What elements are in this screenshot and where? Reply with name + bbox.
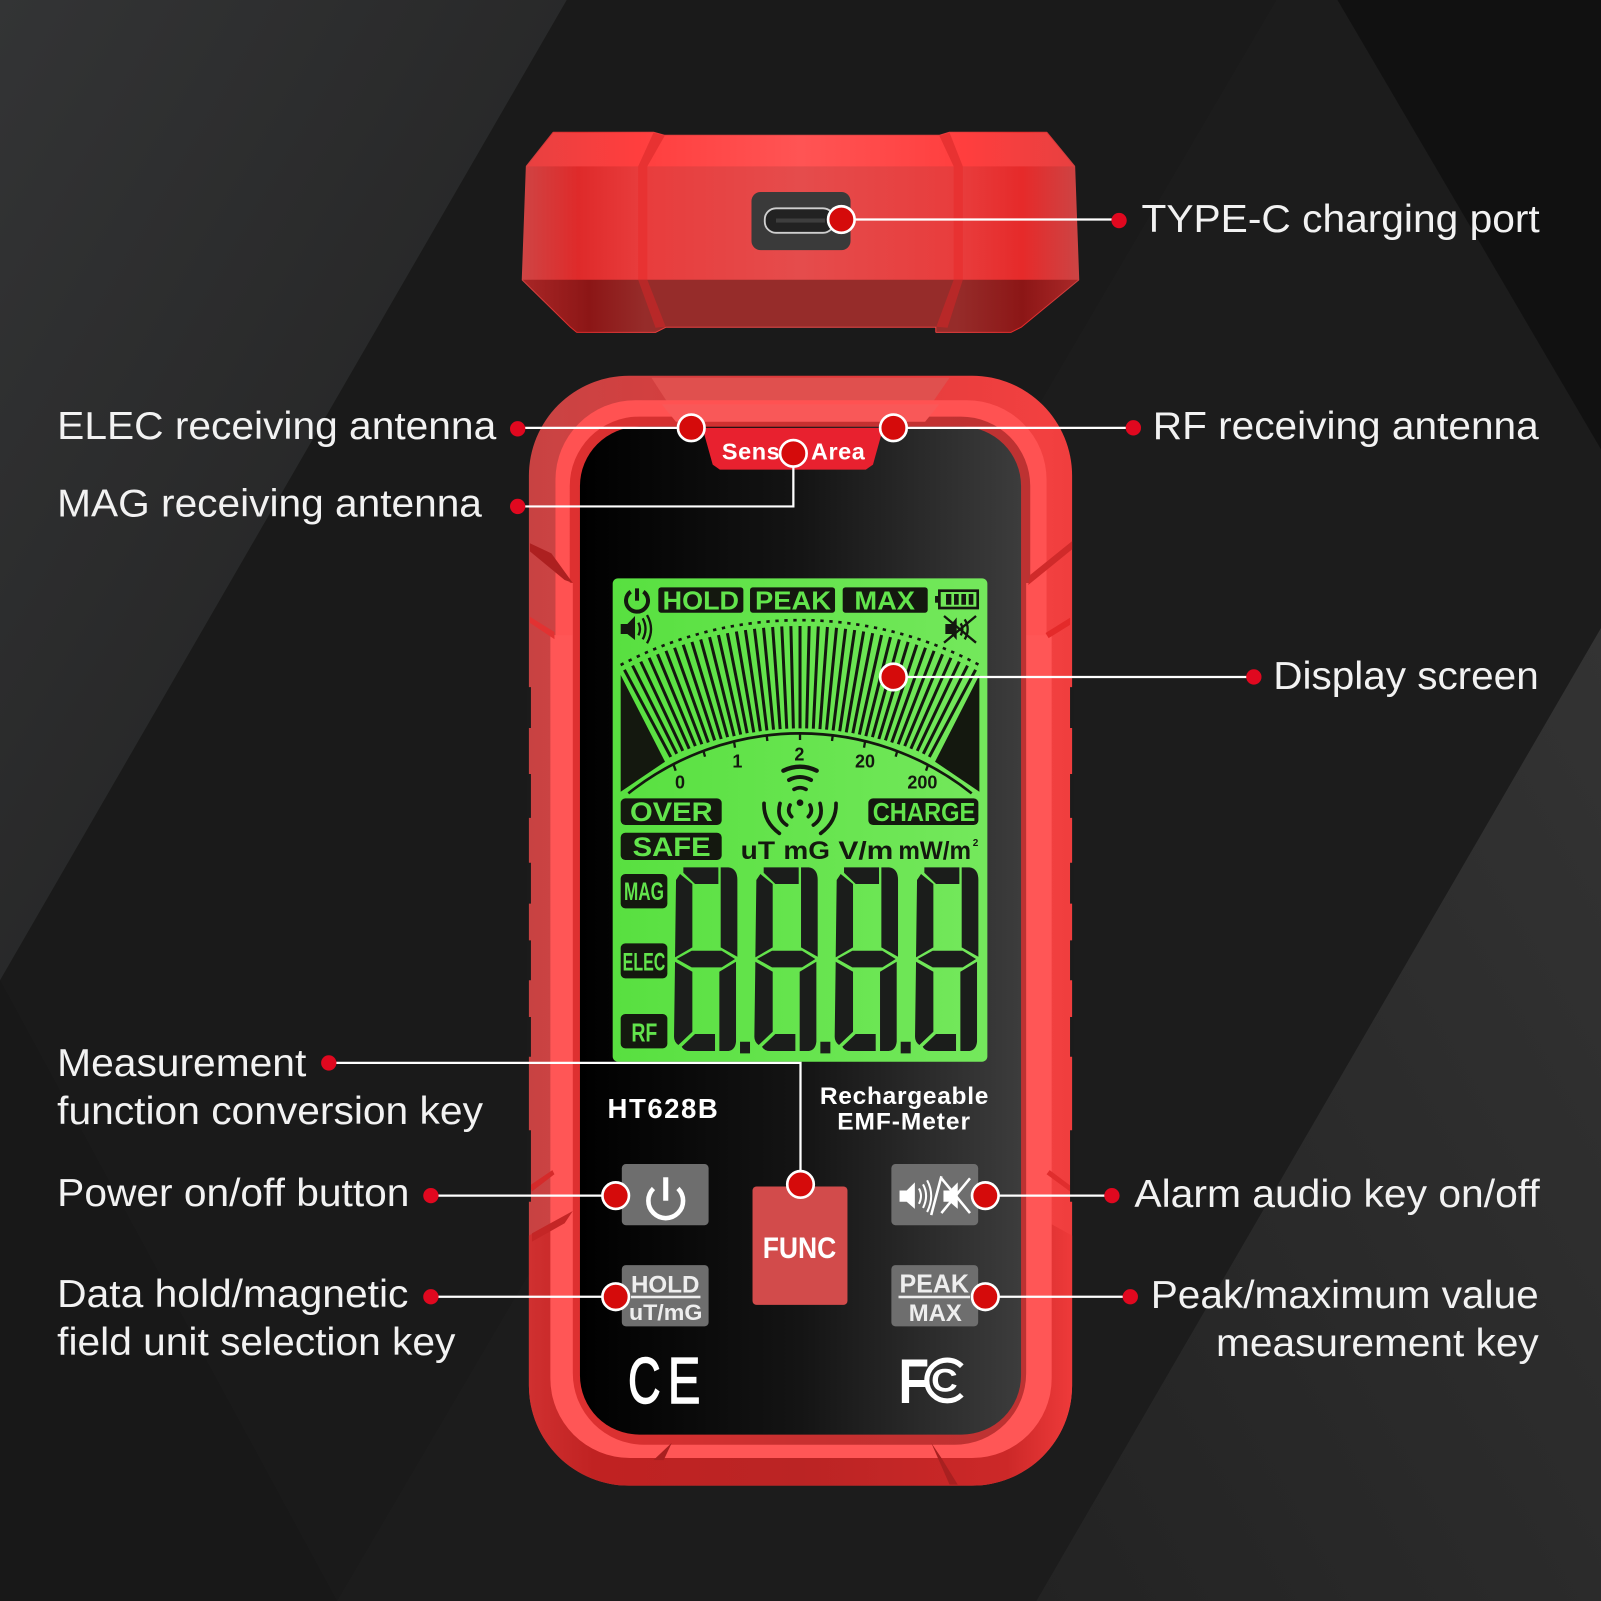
status labels: HOLD (663, 585, 739, 615)
bottom chamfer lines (653, 1443, 958, 1485)
gauge: 20 (855, 751, 875, 771)
unit labels (741, 837, 979, 865)
lower shell (529, 1213, 1072, 1486)
seven-segment digits (674, 867, 978, 1053)
bright ring upper (555, 400, 1047, 715)
gauge: 1 (732, 751, 742, 771)
callout: alarm key: Alarm audio key on/off (1134, 1172, 1540, 1216)
mode badges: CHARGE (873, 797, 975, 827)
callout: type-c: TYPE-C charging port (1142, 197, 1540, 241)
FCC mark: F (899, 1347, 929, 1417)
gauge: 0 (675, 772, 685, 792)
callout: ELEC antenna (57, 404, 705, 448)
callout: hold key (57, 1272, 629, 1364)
mode badges (621, 797, 978, 1048)
gauge: 2 (794, 745, 804, 765)
mode badges: SAFE (633, 832, 711, 862)
callout: display screen (880, 654, 1539, 698)
product description: EMF-Meter (837, 1108, 970, 1135)
FCC mark: C (931, 1362, 958, 1399)
callout: MAG antenna (57, 440, 807, 526)
callout: hold key: field unit selection key (57, 1320, 456, 1364)
screen panel (580, 427, 1021, 1435)
chevrons right (1028, 541, 1072, 585)
callout: function key (57, 1041, 814, 1198)
LCD display (613, 578, 987, 1062)
FCC mark (899, 1347, 962, 1417)
callout: type-c (828, 197, 1540, 241)
chevrons left (530, 543, 573, 583)
callout: MAG antenna: MAG receiving antenna (57, 482, 482, 526)
mode badges: MAG (624, 879, 664, 906)
mode badges: OVER (630, 797, 713, 827)
icon: signal waves (764, 767, 836, 833)
callout: function key: Measurement (57, 1041, 306, 1085)
product description (820, 1083, 988, 1135)
device top view (523, 133, 1078, 332)
unit labels: 2 (973, 838, 979, 849)
CE mark: C (628, 1344, 661, 1417)
callout: RF antenna: RF receiving antenna (1153, 404, 1539, 448)
callout: peak key (972, 1273, 1539, 1365)
unit labels: mW/m (898, 837, 971, 865)
side grip notches (527, 687, 531, 1202)
peak button (891, 1265, 978, 1327)
callout: power button: Power on/off button (57, 1171, 409, 1215)
gauge (621, 620, 979, 793)
device body (527, 376, 1074, 1486)
hold button (622, 1265, 709, 1326)
unit labels: V/m (838, 837, 893, 865)
callout: peak key: measurement key (1216, 1321, 1539, 1365)
callout: RF antenna (880, 404, 1539, 448)
sensor area tab (702, 428, 883, 470)
icon: power (626, 588, 648, 612)
CE mark (628, 1344, 700, 1417)
inner bevel upper (570, 417, 1030, 583)
hold button: uT/mG (629, 1300, 702, 1325)
callout: function key: function conversion key (57, 1089, 483, 1133)
hold button: HOLD (631, 1272, 699, 1299)
bright ring lower (550, 635, 1052, 1458)
callout: ELEC antenna: ELEC receiving antenna (57, 404, 496, 448)
status labels (658, 585, 928, 615)
callout: alarm key (972, 1172, 1540, 1216)
gauge: 200 (907, 772, 937, 792)
status labels: MAX (854, 585, 916, 615)
callout: hold key: Data hold/magnetic (57, 1272, 408, 1316)
callout: peak key: Peak/maximum value (1151, 1273, 1539, 1317)
alarm audio button (891, 1164, 978, 1225)
callout: display screen: Display screen (1273, 654, 1539, 698)
icon: muted speaker (944, 616, 976, 643)
mode badges: RF (631, 1018, 657, 1048)
func button: FUNC (763, 1232, 836, 1265)
inner bevel lower (573, 572, 1026, 1445)
type-c port (751, 192, 851, 250)
power button (622, 1164, 709, 1225)
sensor area tab: Sensor Area (722, 438, 866, 464)
icon: speaker (621, 615, 651, 643)
lower bevel (523, 280, 1078, 332)
peak button: PEAK (900, 1271, 970, 1299)
icon: battery (935, 591, 978, 608)
band lines (638, 133, 665, 280)
mode badges: ELEC (623, 950, 665, 977)
status labels: PEAK (755, 585, 831, 615)
CE mark: E (668, 1344, 700, 1417)
func button (753, 1186, 847, 1305)
product description: Rechargeable (820, 1083, 988, 1110)
model name: HT628B (608, 1093, 718, 1124)
peak button: MAX (909, 1300, 962, 1327)
unit labels: mG (783, 837, 830, 865)
top centre strip (662, 404, 939, 422)
top cap (651, 378, 950, 404)
unit labels: uT (741, 837, 776, 865)
callout: power button (57, 1171, 629, 1215)
top face (527, 133, 1074, 166)
outer shell (529, 376, 1072, 1486)
